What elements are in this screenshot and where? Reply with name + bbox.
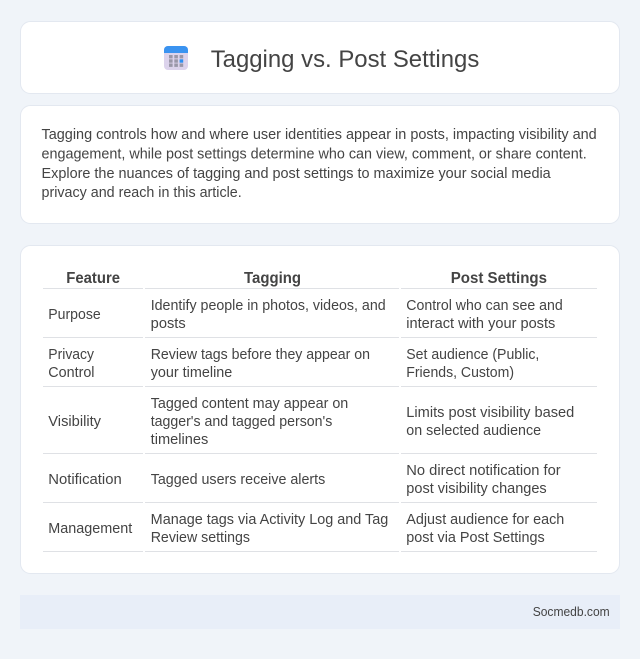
table row: management — [48, 512, 564, 546]
table row: privacy control: Control — [48, 365, 94, 381]
table row: visibility: tagger's and tagged person's — [151, 414, 332, 430]
table row: notification: post visibility changes — [406, 481, 547, 497]
footer — [20, 595, 620, 629]
table row: privacy control: your timeline — [151, 365, 232, 381]
table row: purpose: interact with your posts — [406, 316, 555, 332]
table row: privacy control — [48, 347, 539, 381]
table row: management: Adjust audience for each — [406, 512, 564, 528]
panel: introduction — [20, 106, 620, 224]
table row: visibility: Visibility — [48, 414, 102, 430]
footer: Socmedb.com — [533, 604, 610, 619]
table row: purpose: Purpose — [48, 307, 101, 323]
panel: title card — [20, 22, 620, 94]
table header row — [66, 270, 547, 287]
table row: purpose: posts — [151, 316, 186, 332]
table row: visibility: Limits post visibility based — [406, 405, 574, 421]
title: Tagging vs. Post Settings — [211, 46, 479, 73]
table row: privacy control: Privacy — [48, 347, 95, 363]
table row: visibility: Tagged content may appear on — [151, 396, 348, 412]
table row: notification: Tagged users receive alerts — [151, 472, 325, 488]
text block: introduction — [42, 127, 597, 201]
table row: purpose: Identify people in photos, videos, and — [151, 298, 386, 314]
table row: management: post via Post Settings — [406, 530, 545, 546]
table row: visibility: on selected audience — [406, 423, 541, 439]
table row: privacy control: Set audience (Public, — [406, 347, 539, 363]
table row: management: Management — [48, 521, 132, 537]
table header row: Post Settings — [451, 270, 547, 287]
table row: purpose: Control who can see and — [406, 298, 563, 314]
panel: comparison table — [20, 246, 620, 574]
table header row: Feature — [66, 270, 120, 287]
table row: management: Review settings — [151, 530, 250, 546]
table row: notification: Notification — [48, 472, 122, 488]
icon: calendar — [164, 46, 188, 70]
table row: notification — [48, 463, 561, 497]
table row: notification: No direct notification for — [406, 463, 561, 479]
table row: privacy control: Friends, Custom) — [406, 365, 514, 381]
table row: visibility: timelines — [151, 432, 208, 448]
table header row: Tagging — [244, 270, 301, 287]
table row: visibility — [48, 396, 574, 448]
text block: introduction: Explore the nuances of tagging and post settings to maximize your social media — [42, 166, 551, 182]
text block: introduction: engagement, while post settings determine who can view, comment, or share content. — [42, 146, 587, 162]
text block: introduction: Tagging controls how and where user identities appear in posts, impacting visibility and — [42, 127, 597, 143]
table row: privacy control: Review tags before they appear on — [151, 347, 370, 363]
table row: management: Manage tags via Activity Log and Tag — [151, 512, 388, 528]
table row: purpose — [48, 298, 563, 332]
text block: introduction: privacy and reach in this article. — [42, 185, 242, 201]
